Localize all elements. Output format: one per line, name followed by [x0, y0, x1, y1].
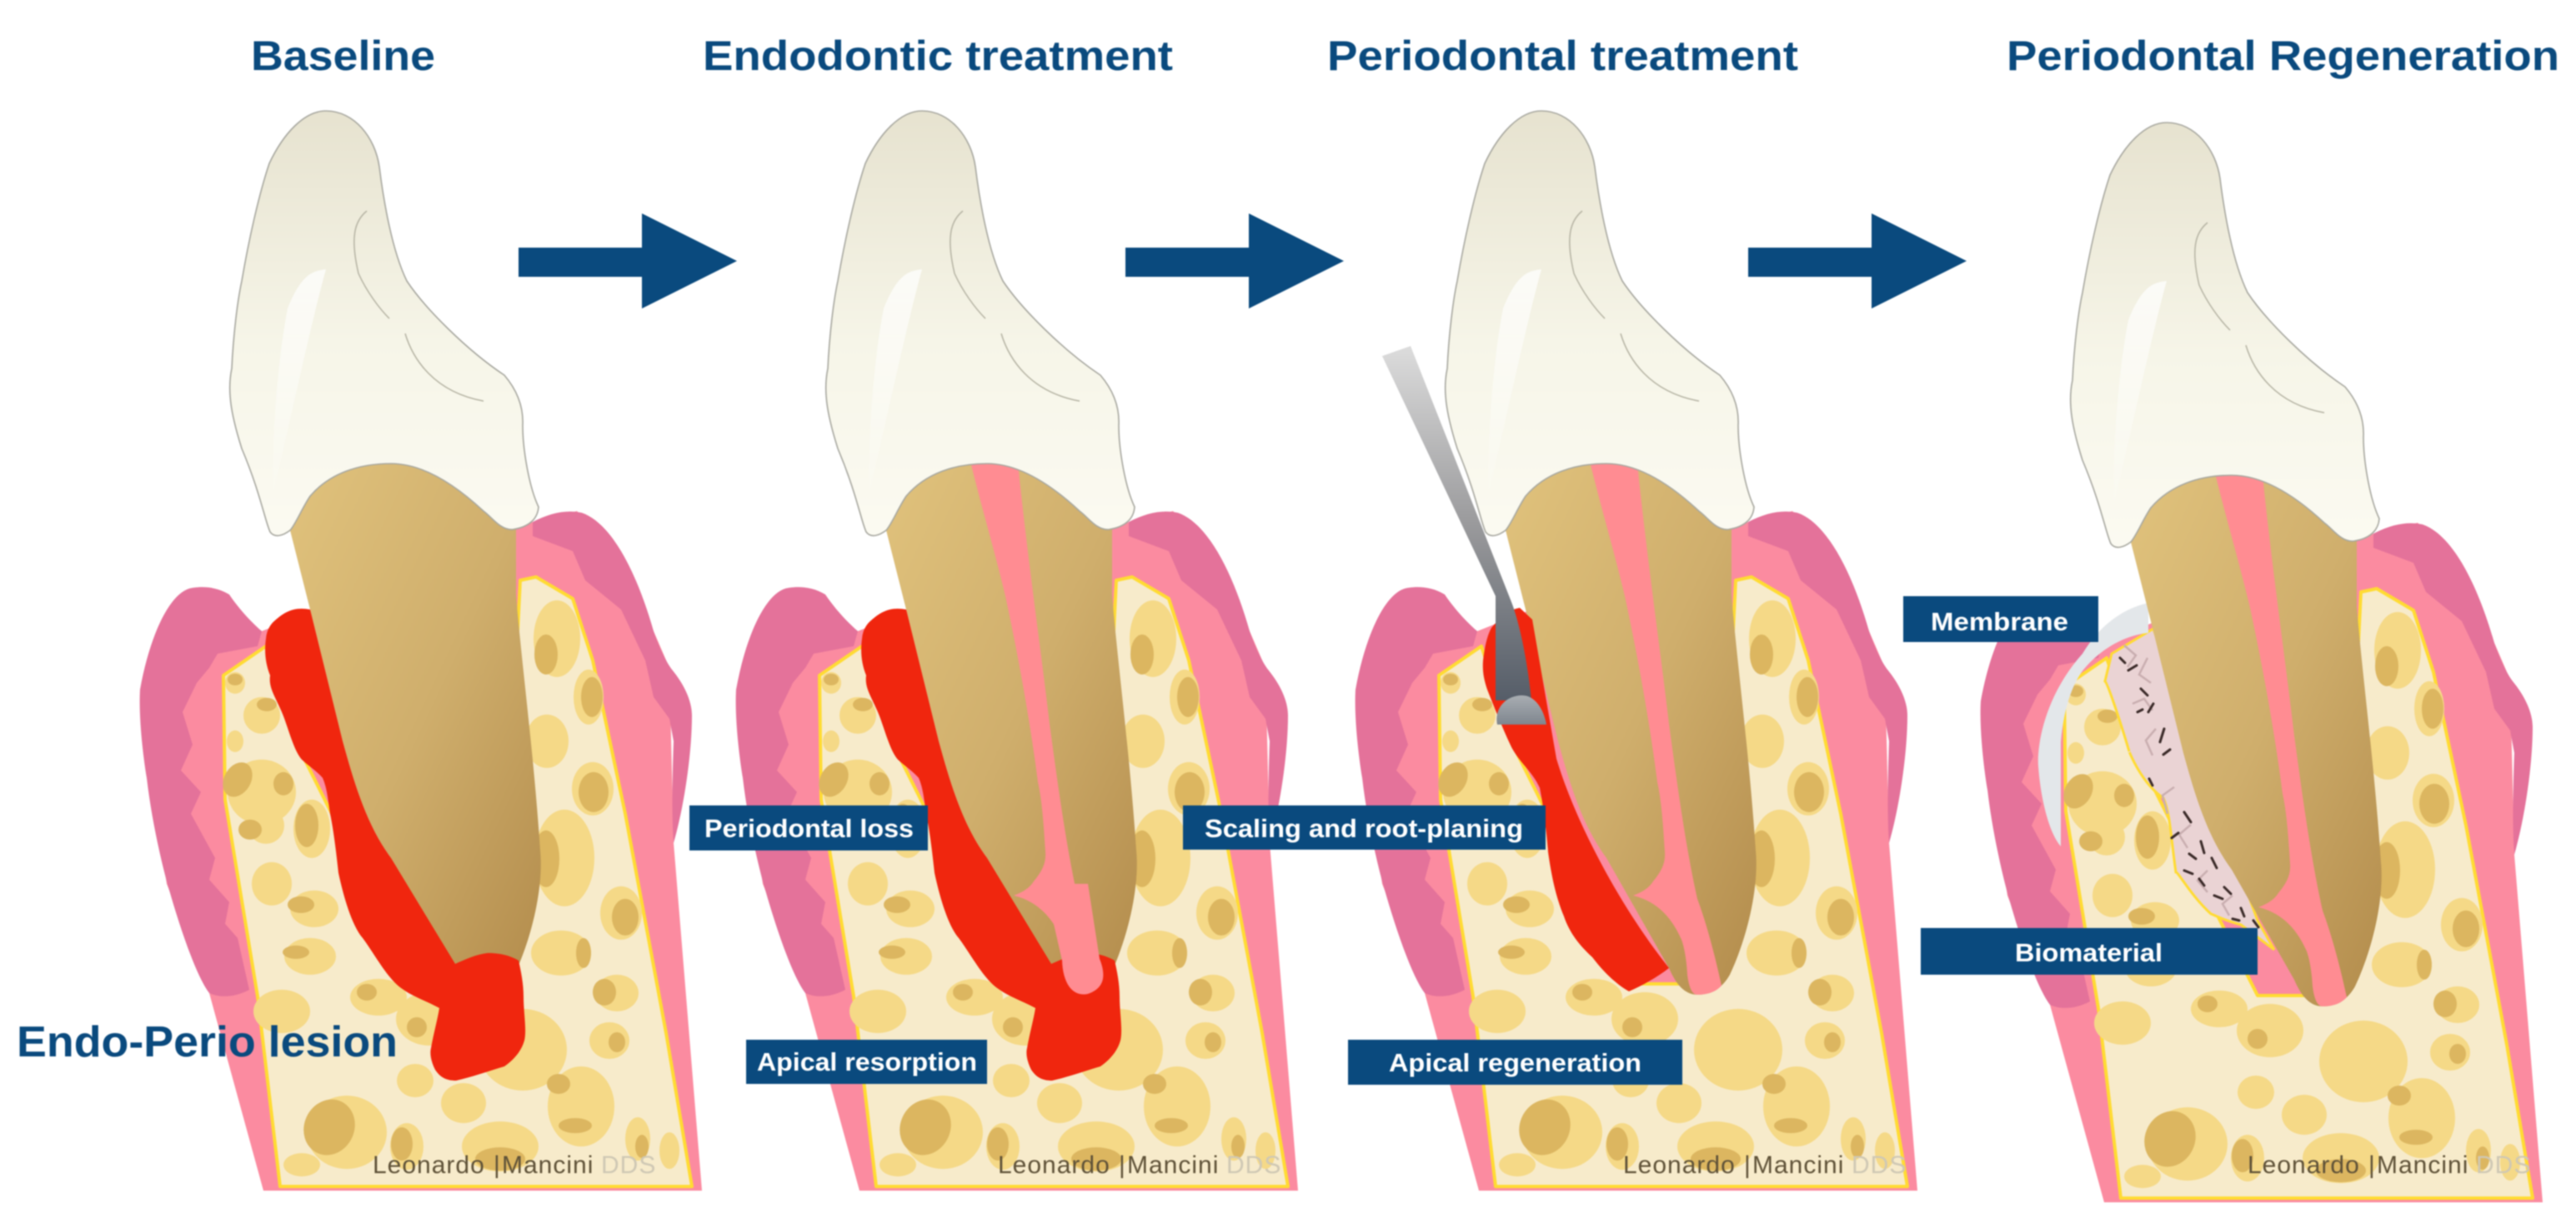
- gums and bone: [1356, 511, 1917, 1191]
- root canal filling: [2213, 466, 2347, 1006]
- tooth root: [2131, 475, 2382, 1006]
- gums and bone: [1981, 523, 2543, 1202]
- lesion with resorption: [861, 609, 1121, 1081]
- arrow 3: [1748, 213, 1967, 309]
- biomaterial graft: [2105, 629, 2274, 950]
- arrow 1: [519, 213, 737, 309]
- tag: Apical regeneration: [1348, 1040, 1682, 1085]
- tag: Biomaterial: [1921, 928, 2258, 975]
- tag: Periodontal loss: Periodontal loss: [704, 814, 914, 843]
- watermark 1: Leonardo: [373, 1151, 485, 1179]
- tag: Scaling and root-planing: [1183, 805, 1546, 850]
- heading: Baseline: Baseline: [251, 33, 435, 79]
- watermark 4: Leonardo: [2248, 1151, 2360, 1179]
- gums and bone: [736, 511, 1298, 1191]
- watermark 2: Leonardo: [998, 1151, 1110, 1179]
- watermark 4: DDS: [2476, 1151, 2531, 1179]
- watermark 3: Leonardo: [1623, 1151, 1736, 1179]
- canal apex: [1045, 884, 1103, 995]
- root canal filling: [969, 454, 1102, 995]
- label: Endo-Perio lesion: Endo-Perio lesion: [17, 1018, 398, 1066]
- watermark 2: DDS: [1226, 1151, 1281, 1179]
- watermark 1: Mancini: [502, 1151, 594, 1179]
- watermark 4: Mancini: [2377, 1151, 2468, 1179]
- panel: periodontal regeneration: [1981, 123, 2543, 1202]
- panel: periodontal treatment: [1356, 111, 1917, 1191]
- arrow 2: [1125, 213, 1344, 309]
- tag: Membrane: Membrane: [1931, 607, 2068, 636]
- membrane: [2038, 603, 2148, 846]
- tag: Apical resorption: Apical resorption: [757, 1047, 977, 1076]
- tag: Periodontal loss: [689, 805, 928, 850]
- tag: Apical resorption: [746, 1040, 987, 1084]
- watermark 2: |: [1119, 1151, 1126, 1179]
- tooth crown: [826, 111, 1135, 535]
- tooth crown: [2071, 123, 2379, 547]
- tooth root: [886, 464, 1137, 995]
- tag: Scaling and root-planing: Scaling and root-planing: [1205, 814, 1523, 843]
- tooth root: [290, 464, 541, 995]
- watermark 2: Mancini: [1127, 1151, 1219, 1179]
- tooth crown: [230, 111, 539, 535]
- watermark 1: |: [494, 1151, 501, 1179]
- instrument: curette: [1382, 346, 1546, 725]
- root canal filling: [1588, 454, 1722, 995]
- tag: Apical regeneration: Apical regeneration: [1389, 1048, 1641, 1077]
- heading: Endodontic treatment: Endodontic treatment: [703, 33, 1173, 79]
- heading: Periodontal Regeneration: Periodontal Regeneration: [2007, 33, 2559, 79]
- watermark 3: DDS: [1852, 1151, 1907, 1179]
- tooth crown: [1446, 111, 1754, 535]
- heading: Periodontal treatment: Periodontal treatment: [1327, 33, 1798, 79]
- residual lesion: [1483, 608, 1669, 991]
- panel: endodontic treatment: [736, 111, 1298, 1191]
- watermark 3: |: [1744, 1151, 1752, 1179]
- gums and bone: [140, 511, 702, 1191]
- endo-perio lesion shape: [265, 609, 525, 1081]
- tag: Membrane: [1903, 596, 2098, 642]
- tooth root: [1506, 464, 1757, 995]
- watermark 3: Mancini: [1752, 1151, 1844, 1179]
- tag: Biomaterial: Biomaterial: [2015, 938, 2163, 967]
- watermark 1: DDS: [601, 1151, 656, 1179]
- panel: baseline: [140, 111, 702, 1191]
- watermark 4: |: [2368, 1151, 2376, 1179]
